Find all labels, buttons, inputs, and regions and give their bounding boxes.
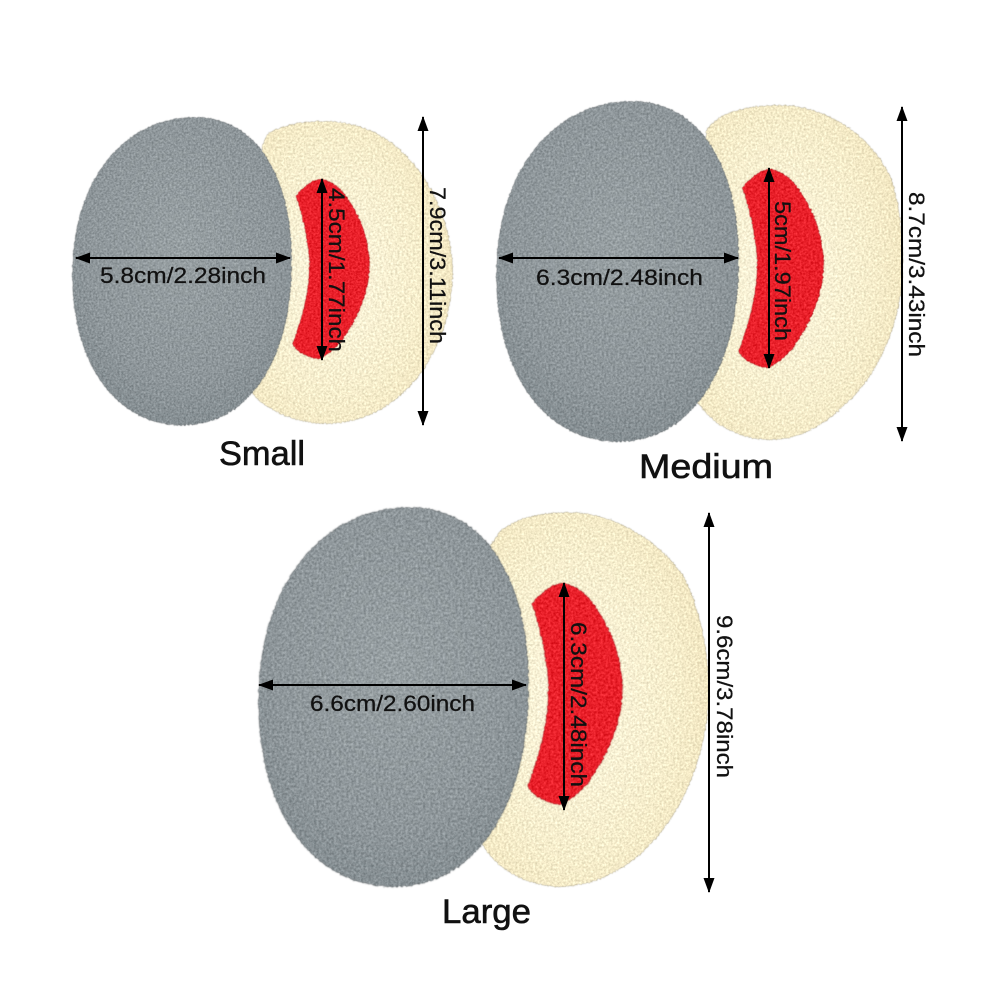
outer height label: small: 7.9cm/3.11inch <box>425 187 450 344</box>
red inner lining: medium <box>738 169 824 368</box>
width label: large: 6.6cm/2.60inch <box>310 691 475 716</box>
title: Medium: Medium <box>639 448 773 486</box>
inner height arrow: small <box>321 179 323 360</box>
width label: medium: 6.3cm/2.48inch <box>536 265 703 290</box>
gray fleece front: large <box>258 507 529 887</box>
width label: small: 5.8cm/2.28inch <box>100 263 266 288</box>
outer height arrow: large <box>708 513 710 892</box>
outer height arrow: small <box>422 117 424 425</box>
title: Large: Large <box>442 893 531 931</box>
inner height arrow: medium <box>768 168 770 368</box>
inner height label: medium: 5cm/1.97inch <box>770 201 795 341</box>
cream fleece back: small <box>245 121 453 424</box>
inner height arrow: large <box>563 583 565 810</box>
panel: large earmuff <box>258 507 737 931</box>
width arrow: small <box>76 257 290 259</box>
outer height label: medium: 8.7cm/3.43inch <box>904 192 929 357</box>
panel: medium earmuff <box>496 101 929 486</box>
outer height arrow: medium <box>901 107 903 441</box>
gray fleece front: medium <box>496 101 739 442</box>
cream fleece back: large <box>475 512 709 887</box>
width arrow: large <box>259 684 526 686</box>
red inner lining: small <box>292 179 370 359</box>
outer height label: large: 9.6cm/3.78inch <box>712 615 737 778</box>
width arrow: medium <box>499 257 738 259</box>
title: Small: Small <box>219 435 305 473</box>
gray fleece front: small <box>72 117 292 426</box>
inner height label: large: 6.3cm/2.48inch <box>566 622 591 787</box>
cream fleece back: medium <box>690 105 903 440</box>
inner height label: small: 4.5cm/1.77inch <box>324 188 349 352</box>
panel: small earmuff <box>72 117 453 473</box>
red inner lining: large <box>527 583 623 805</box>
